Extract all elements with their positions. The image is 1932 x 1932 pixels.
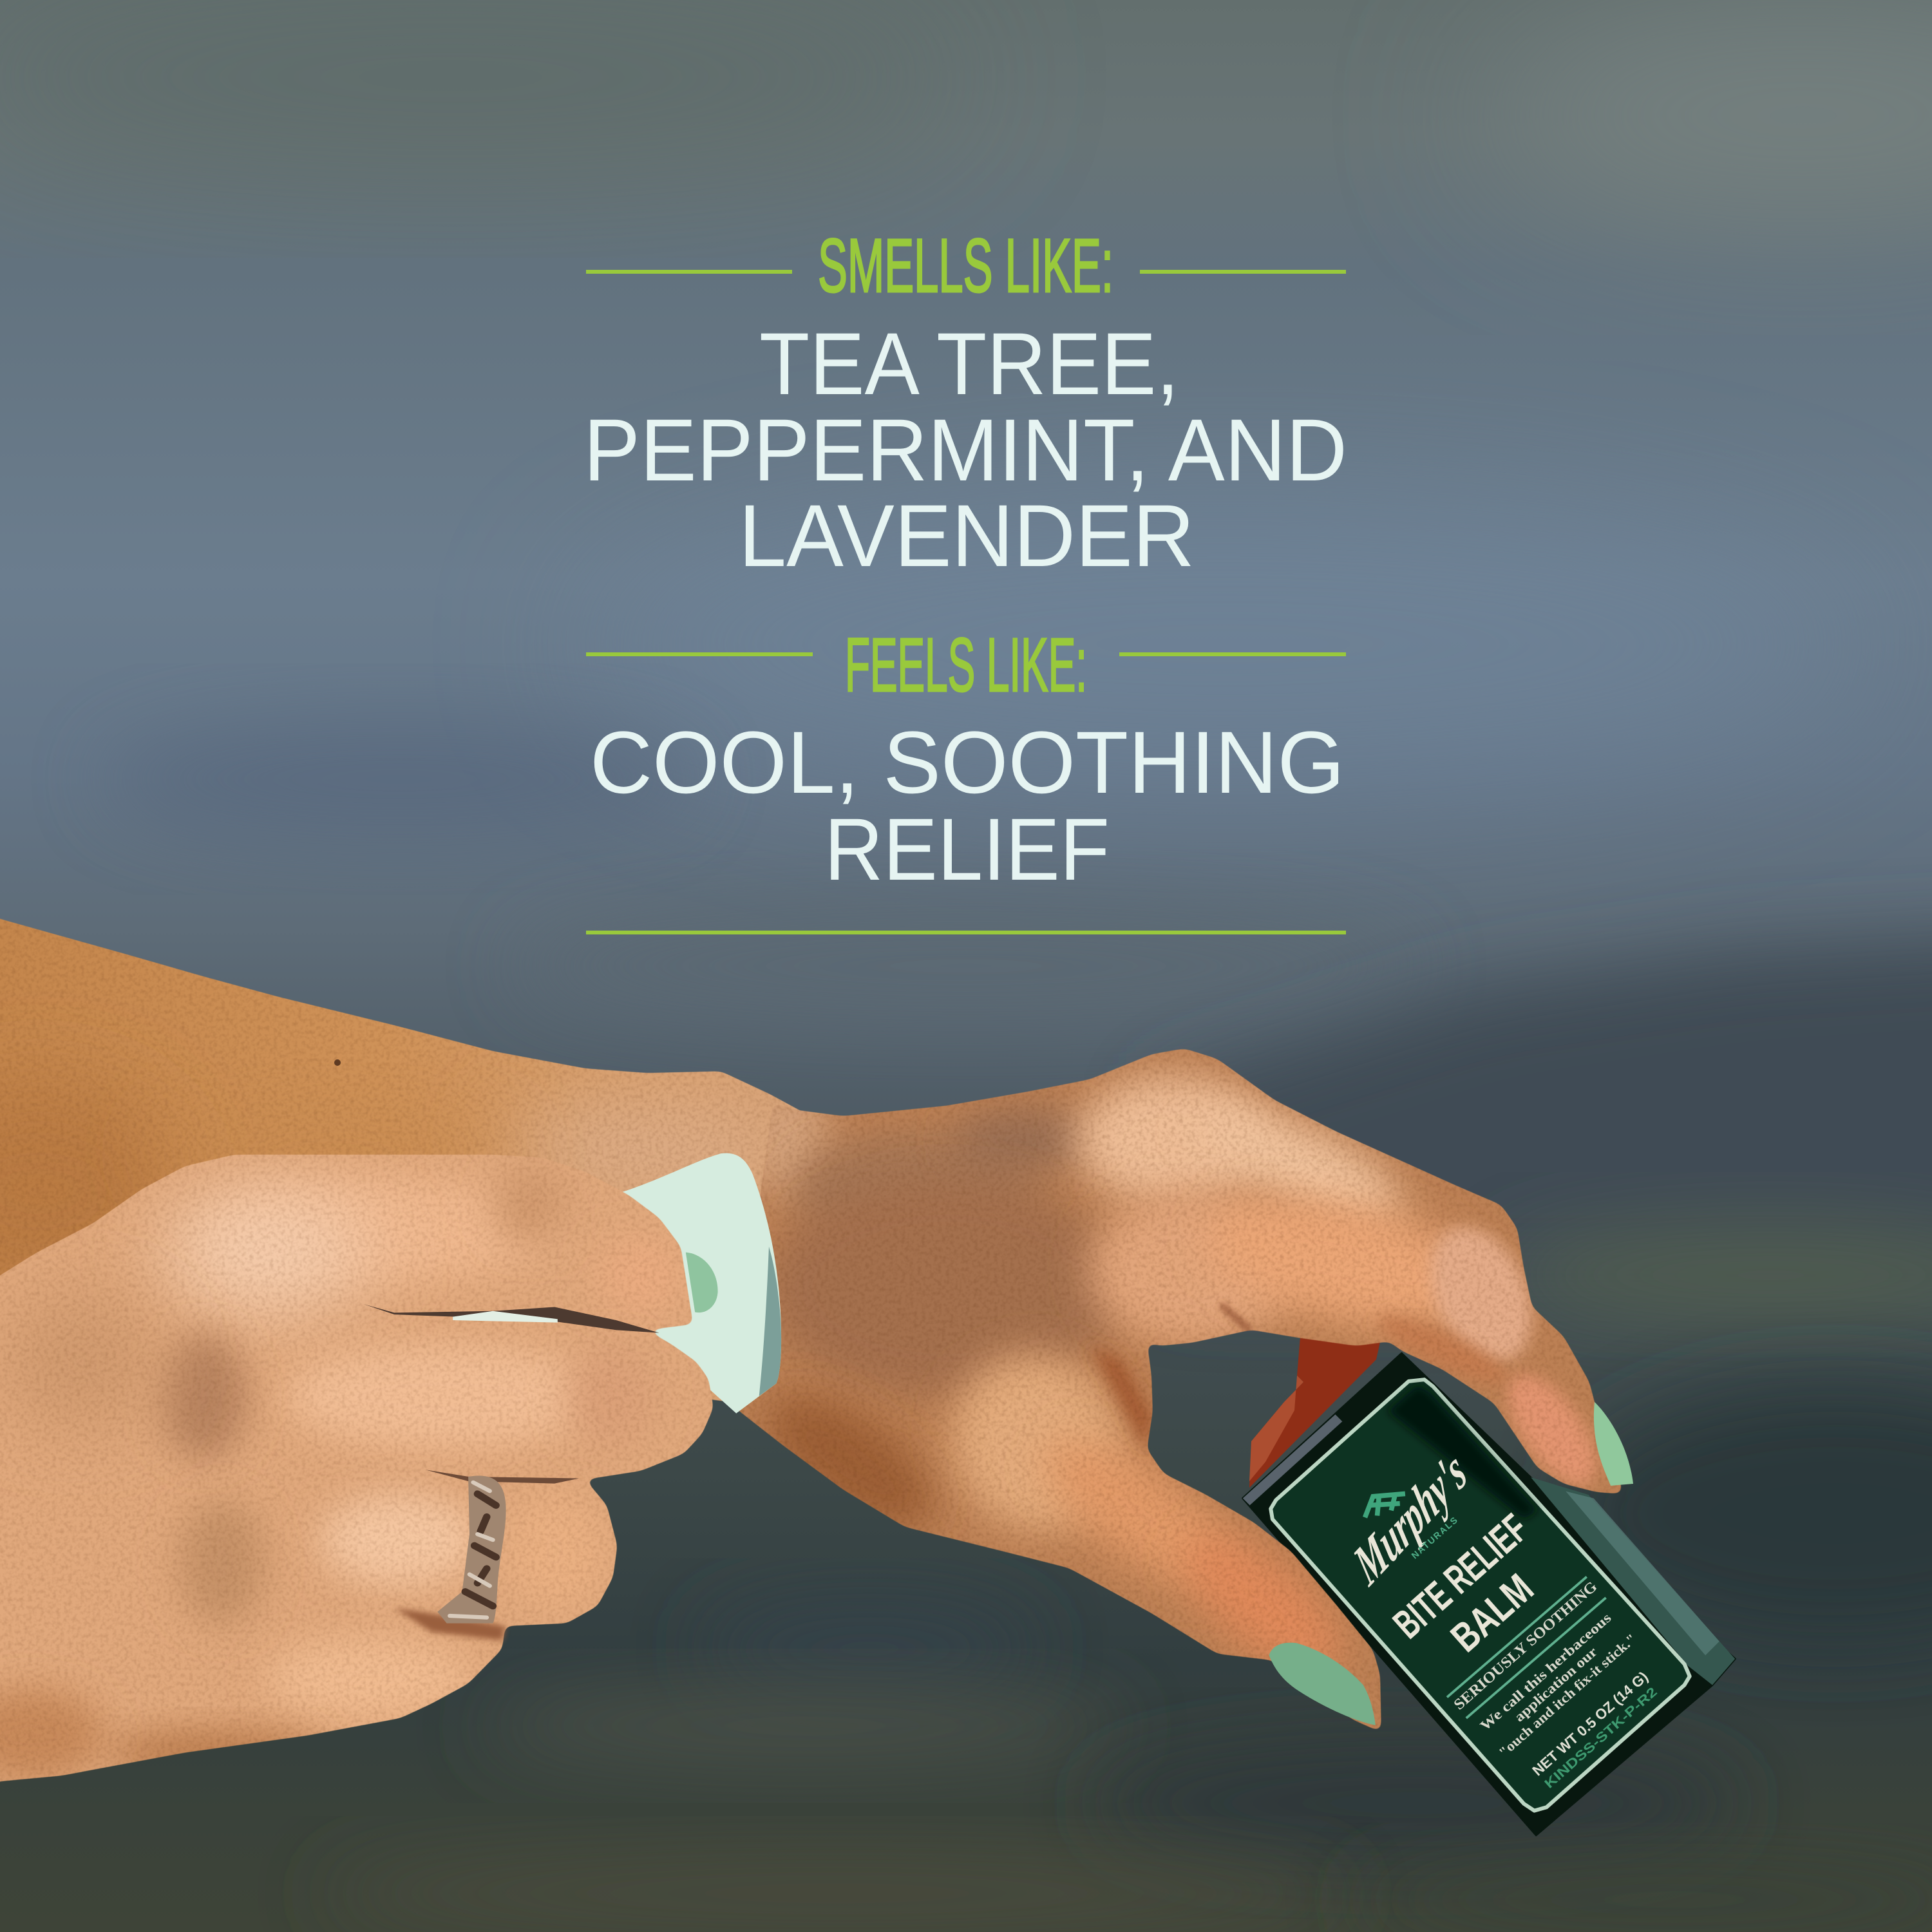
stick side shading <box>759 1247 781 1396</box>
thumb web shadow <box>1090 1346 1153 1452</box>
forearm <box>0 918 800 1401</box>
finger gaps and nail <box>363 1253 718 1640</box>
scent description: LAVENDER <box>739 487 1195 585</box>
product name second line: BALM <box>1442 1565 1542 1661</box>
sku: KINDSS-STK-P-R2 <box>1542 1684 1660 1792</box>
section rule right: smells like <box>1140 270 1346 274</box>
net weight: NET WT 0.5 OZ (14 G) <box>1529 1668 1651 1779</box>
translucent stick edge <box>1531 1477 1735 1685</box>
rule above tagline <box>1447 1577 1587 1697</box>
label panel <box>1271 1379 1690 1811</box>
balm applicator stick <box>456 1153 781 1414</box>
feel description <box>590 714 1345 899</box>
description line 1: We call this herbaceous <box>1477 1610 1615 1734</box>
ring <box>437 1475 506 1624</box>
scent description: PEPPERMINT, AND <box>583 401 1347 500</box>
section rule left: feels like <box>586 652 813 656</box>
section rule right: feels like <box>1119 652 1346 656</box>
left hand fingernail <box>686 1253 718 1312</box>
product name: BITE RELIEF <box>1385 1505 1537 1647</box>
product tin: Bite Relief Balm <box>1243 1353 1735 1835</box>
index finger crease <box>1221 1305 1250 1331</box>
tin body <box>1243 1353 1735 1835</box>
scent description <box>583 315 1347 585</box>
section rule left: smells like <box>586 270 792 274</box>
index fingernail <box>1594 1402 1633 1486</box>
scent description: TEA TREE, <box>759 315 1179 413</box>
right hand <box>739 1048 1633 1729</box>
description line 2: application our <box>1511 1643 1600 1725</box>
tagline: SERIOUSLY SOOTHING <box>1451 1578 1600 1714</box>
rule below tagline <box>1466 1598 1606 1718</box>
heading: feels like: FEELS LIKE: <box>845 623 1087 708</box>
heading: smells like: SMELLS LIKE: <box>818 223 1113 308</box>
distant ridge <box>1159 934 1932 1288</box>
left hand <box>0 1095 773 1803</box>
bottom section rule <box>586 931 1346 934</box>
logo mountains <box>1365 1493 1405 1517</box>
thumb nail <box>1269 1643 1376 1725</box>
description line 3: "ouch and itch fix-it stick." <box>1496 1631 1640 1760</box>
feel description: COOL, SOOTHING <box>590 714 1345 812</box>
middle finger behind the tin <box>1249 1336 1381 1488</box>
logo naturals: NATURALS <box>1409 1515 1459 1560</box>
logo script: Murphy's <box>1345 1438 1475 1599</box>
feel description: RELIEF <box>824 800 1110 899</box>
gloss shadow on label top edge <box>1388 1385 1538 1519</box>
